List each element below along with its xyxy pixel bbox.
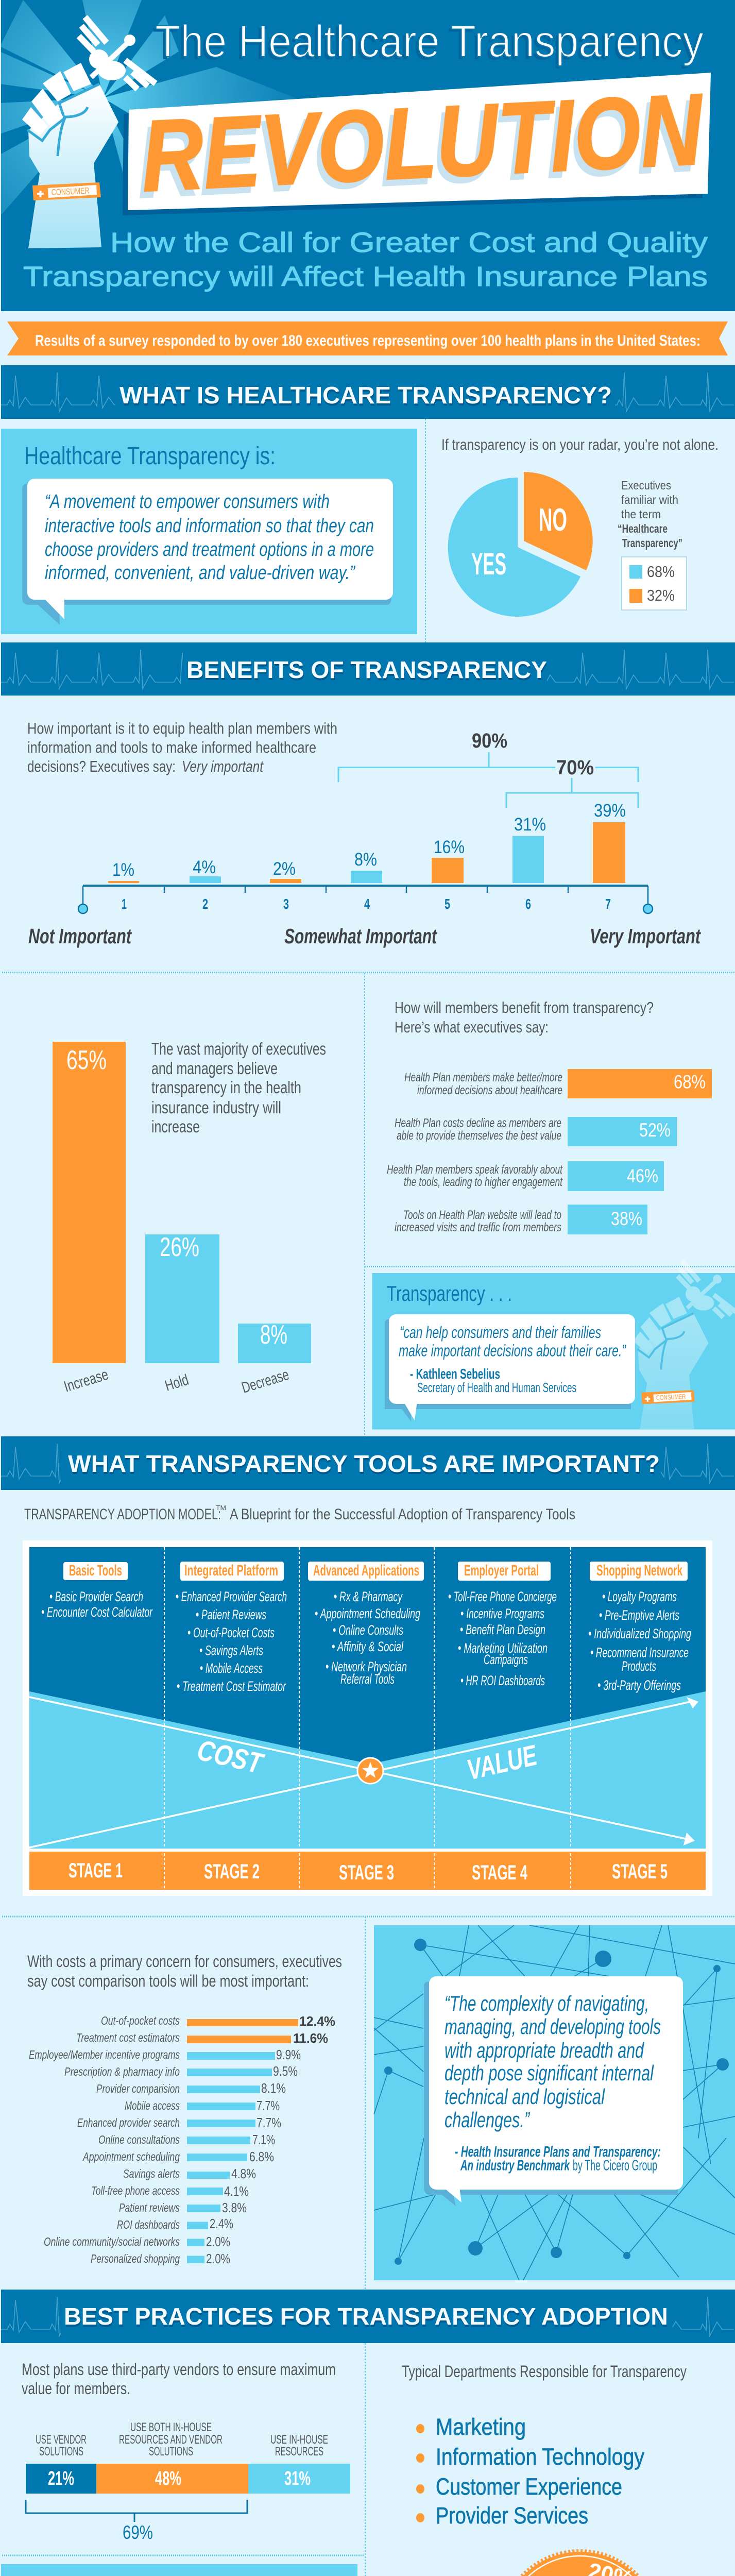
speech bubble bbox=[424, 1976, 683, 2206]
stacked bar: vendors: RESOURCES AND VENDOR bbox=[119, 2433, 223, 2447]
bar chart: cost comparison tools: Online consultations bbox=[98, 2133, 180, 2146]
bar chart: importance scale: 16% bbox=[434, 837, 465, 857]
text: how important bbox=[27, 719, 337, 775]
department list: Marketing bbox=[436, 2414, 526, 2440]
bar chart: transparency will increase: Hold bbox=[163, 1371, 191, 1395]
network nodes bbox=[384, 1939, 729, 2265]
stage 4 tools: • HR ROI Dashboards bbox=[460, 1673, 545, 1688]
quote: make important decisions about their care.” bbox=[399, 1342, 626, 1360]
quote: challenges.” bbox=[445, 2108, 530, 2132]
axis: 6 bbox=[525, 896, 531, 912]
icon: faded fist bbox=[634, 1261, 735, 1442]
text: how will members benefit bbox=[395, 998, 654, 1036]
stage 3 tools: • Affinity & Social bbox=[332, 1639, 404, 1654]
text: costs a primary concern: With costs a primary concern for consumers, executives bbox=[27, 1952, 342, 1971]
text: vast majority: transparency in the health bbox=[151, 1078, 301, 1097]
bar chart: transparency will increase bbox=[53, 1042, 311, 1397]
bar chart: importance scale: 39% bbox=[594, 801, 626, 821]
quote bbox=[445, 1991, 661, 2174]
adoption model subheading: A Blueprint for the Successful Adoption of Transparency Tools bbox=[230, 1506, 575, 1523]
bar chart: cost comparison tools bbox=[29, 2013, 335, 2266]
department list: Information Technology bbox=[436, 2444, 644, 2470]
bar chart: cost comparison tools: Patient reviews bbox=[119, 2201, 180, 2214]
text: executives familiar: the term bbox=[621, 507, 661, 521]
stage pills bbox=[63, 1562, 688, 1581]
stage labels: STAGE 2 bbox=[204, 1860, 260, 1883]
scale labels: Very Important bbox=[590, 924, 702, 948]
text: vast majority: increase bbox=[151, 1117, 200, 1136]
stage 3 tools: • Online Consults bbox=[333, 1622, 403, 1638]
speech bubble bbox=[22, 479, 393, 625]
stage labels bbox=[69, 1859, 668, 1884]
stacked bar: vendors: USE IN-HOUSE bbox=[270, 2433, 328, 2447]
text: how important: decisions? Executives say: bbox=[27, 757, 176, 775]
bar chart: cost comparison tools: Toll-free phone access bbox=[91, 2184, 180, 2197]
bar chart: member benefits: Health Plan members speak favorably about bbox=[387, 1163, 563, 1177]
axis: 5 bbox=[445, 896, 450, 912]
text: third-party vendors: value for members. bbox=[22, 2379, 130, 2398]
bar chart: cost comparison tools: Prescription & pharmacy info bbox=[64, 2065, 180, 2078]
panel: definition bbox=[0, 429, 417, 634]
bar chart: cost comparison tools: 7.7% bbox=[257, 2098, 280, 2113]
header panel bbox=[0, 0, 735, 311]
section heading: benefits: BENEFITS OF TRANSPARENCY bbox=[186, 656, 547, 683]
stage 2 tools: • Out-of-Pocket Costs bbox=[187, 1625, 275, 1640]
bar chart: member benefits: Tools on Health Plan website will lead to bbox=[403, 1208, 561, 1222]
panel heading: Transparency . . . bbox=[387, 1281, 512, 1306]
department list bbox=[416, 2414, 644, 2529]
icon: raised fist holding hands icon bbox=[22, 17, 156, 248]
bar chart: cost comparison tools: Out-of-pocket costs bbox=[101, 2014, 180, 2027]
stage 3 tools: Referral Tools bbox=[340, 1671, 395, 1687]
stage 5 tools: • 3rd-Party Offerings bbox=[597, 1677, 681, 1693]
stage 2 tools: • Savings Alerts bbox=[199, 1642, 263, 1658]
bar chart: importance scale: 31% bbox=[514, 815, 546, 835]
quote: “A movement to empower consumers with bbox=[45, 491, 330, 513]
axis: 4 bbox=[364, 896, 370, 912]
text: vast majority: and managers believe bbox=[151, 1059, 278, 1078]
stacked bar: vendors: SOLUTIONS bbox=[39, 2445, 83, 2459]
bar chart: importance scale: 4% bbox=[193, 857, 216, 877]
title line: The Healthcare Transparency bbox=[152, 19, 701, 69]
bar chart: member benefits bbox=[387, 1069, 712, 1234]
stage 2 tools: • Patient Reviews bbox=[196, 1607, 266, 1622]
bar chart: member benefits: 46% bbox=[627, 1165, 658, 1187]
quote: “can help consumers and their families bbox=[400, 1323, 601, 1342]
stage 3 tools: • Rx & Pharmacy bbox=[334, 1589, 403, 1604]
scale labels: Not Important bbox=[28, 924, 132, 948]
quote: depth pose significant internal bbox=[445, 2061, 654, 2085]
stacked bar: vendors: RESOURCES bbox=[275, 2445, 323, 2459]
bar chart: cost comparison tools: Savings alerts bbox=[123, 2167, 180, 2180]
title line: The Healthcare Transparency bbox=[155, 16, 704, 66]
stage 1 tools: • Encounter Cost Calculator bbox=[41, 1604, 153, 1620]
section heading: best practices bbox=[0, 2290, 735, 2343]
stacked bar: vendors: 31% bbox=[284, 2468, 311, 2489]
stage pills: Advanced Applications bbox=[313, 1562, 419, 1579]
bar chart: cost comparison tools: Provider comparision bbox=[96, 2082, 180, 2095]
stage labels: STAGE 4 bbox=[472, 1861, 527, 1884]
bar chart: cost comparison tools: Employee/Member incentive programs bbox=[29, 2048, 180, 2061]
quote: with appropriate breadth and bbox=[445, 2038, 644, 2062]
scale labels: Somewhat Important bbox=[284, 924, 438, 948]
bar chart: cost comparison tools: Treatment cost estimators bbox=[76, 2031, 180, 2044]
stage 2 tools: • Enhanced Provider Search bbox=[176, 1589, 287, 1604]
stage 4 tools: • Incentive Programs bbox=[460, 1606, 544, 1621]
pie legend: 68% bbox=[647, 563, 675, 581]
bar chart: cost comparison tools: 7.7% bbox=[257, 2115, 281, 2130]
bar chart: cost comparison tools: 9.5% bbox=[273, 2063, 298, 2079]
bar chart: importance scale: 8% bbox=[354, 850, 377, 870]
stage 4 tools: • Marketing Utilization bbox=[458, 1640, 548, 1656]
subtitle bbox=[23, 227, 708, 292]
bar chart: cost comparison tools: 2.0% bbox=[206, 2234, 230, 2249]
quote: choose providers and treatment options in a more bbox=[45, 539, 374, 561]
stage 3 tools bbox=[315, 1589, 420, 1687]
quote: informed, convenient, and value-driven way.” bbox=[45, 562, 356, 584]
axis: 2 bbox=[202, 896, 208, 912]
scale labels bbox=[28, 924, 702, 948]
panel: transparency quote bbox=[372, 1261, 735, 1442]
text: how important: Very important bbox=[182, 757, 264, 775]
text: executives familiar: Executives bbox=[621, 479, 671, 492]
heading: Healthcare Transparency is: bbox=[24, 443, 276, 470]
bar chart: member benefits: informed decisions about healthcare bbox=[417, 1083, 562, 1097]
pie legend: 32% bbox=[647, 586, 675, 604]
stage 4 tools: • Benefit Plan Design bbox=[460, 1622, 545, 1637]
adoption model subheading bbox=[24, 1504, 575, 1523]
stacked bar: vendors: 48% bbox=[155, 2468, 181, 2489]
section heading: tools: WHAT TRANSPARENCY TOOLS ARE IMPORTANT? bbox=[68, 1450, 660, 1477]
text: costs a primary concern bbox=[27, 1952, 342, 1990]
panel: complexity quote bbox=[374, 1925, 735, 2280]
panel: adoption model bbox=[23, 1540, 712, 1896]
bar chart: cost comparison tools: 3.8% bbox=[222, 2200, 247, 2215]
panel: consumers quote bbox=[0, 2564, 357, 2576]
badge: 20 percent bbox=[500, 2545, 663, 2576]
bar chart: transparency will increase: 65% bbox=[66, 1045, 107, 1075]
text: vast majority bbox=[151, 1039, 326, 1136]
stage 2 tools: • Treatment Cost Estimator bbox=[177, 1679, 286, 1694]
text: vast majority: The vast majority of executives bbox=[151, 1039, 326, 1058]
quote: technical and logistical bbox=[445, 2084, 605, 2109]
70 percent bracket bbox=[506, 756, 638, 808]
69 percent bracket bbox=[26, 2500, 247, 2543]
70 percent bracket: 70% bbox=[556, 756, 594, 779]
bar chart: importance scale: 2% bbox=[273, 859, 296, 879]
bar chart: cost comparison tools: Enhanced provider search bbox=[77, 2116, 180, 2129]
stacked bar: vendors: SOLUTIONS bbox=[149, 2445, 193, 2459]
bar chart: cost comparison tools: 2.4% bbox=[210, 2216, 233, 2231]
quote bbox=[45, 491, 374, 584]
stage 5 tools: • Pre-Emptive Alerts bbox=[599, 1607, 679, 1623]
stacked bar: vendors bbox=[26, 2420, 350, 2543]
text: how important: information and tools to make informed healthcare bbox=[27, 738, 316, 756]
section heading: tools bbox=[0, 1436, 735, 1490]
quote bbox=[399, 1323, 626, 1395]
axis: 3 bbox=[283, 896, 289, 912]
bar chart: cost comparison tools: 4.1% bbox=[224, 2183, 249, 2199]
cost line bbox=[29, 1697, 695, 1845]
quote: - Kathleen Sebelius bbox=[410, 1366, 500, 1382]
text: how will members benefit: Here’s what executives say: bbox=[395, 1018, 549, 1036]
stacked bar: vendors: USE VENDOR bbox=[36, 2433, 87, 2447]
stage pills: Basic Tools bbox=[69, 1562, 122, 1579]
stage 4 tools: • Toll-Free Phone Concierge bbox=[448, 1589, 557, 1604]
section heading: what is healthcare transparency bbox=[0, 365, 735, 419]
bar chart: member benefits: 52% bbox=[639, 1120, 671, 1141]
bar chart: member benefits: 68% bbox=[674, 1072, 706, 1092]
pie chart bbox=[448, 472, 593, 617]
bar chart: member benefits: increased visits and traffic from members bbox=[395, 1221, 561, 1234]
stage labels: STAGE 3 bbox=[339, 1861, 394, 1884]
stage labels: STAGE 5 bbox=[612, 1860, 668, 1883]
bar chart: transparency will increase: 26% bbox=[160, 1232, 199, 1262]
stage 1 tools: • Basic Provider Search bbox=[49, 1589, 143, 1604]
section heading: best practices: BEST PRACTICES FOR TRANSPARENCY ADOPTION bbox=[64, 2303, 668, 2330]
bar chart: cost comparison tools: 2.0% bbox=[206, 2251, 230, 2266]
bar chart: member benefits: 38% bbox=[611, 1208, 642, 1229]
stage pills: Employer Portal bbox=[464, 1562, 539, 1579]
stage 5 tools: Products bbox=[622, 1658, 656, 1674]
axis: 7 bbox=[605, 896, 611, 912]
bar chart: cost comparison tools: 8.1% bbox=[261, 2080, 286, 2096]
text: executives familiar: Transparency” bbox=[622, 536, 682, 550]
bar chart: cost comparison tools: ROI dashboards bbox=[117, 2218, 180, 2231]
stacked bar: vendors: 21% bbox=[48, 2468, 74, 2489]
text: how will members benefit: How will members benefit from transparency? bbox=[395, 998, 654, 1016]
stage pills: Integrated Platform bbox=[184, 1562, 278, 1579]
text: executives familiar bbox=[618, 479, 682, 550]
section heading: what is healthcare transparency: WHAT IS HEALTHCARE TRANSPARENCY? bbox=[119, 382, 612, 409]
stage 2 tools: • Mobile Access bbox=[200, 1660, 263, 1676]
stage 3 tools: • Network Physician bbox=[326, 1659, 407, 1674]
value label: VALUE bbox=[464, 1738, 540, 1786]
bar chart: cost comparison tools: 6.8% bbox=[249, 2149, 274, 2164]
department list: Customer Experience bbox=[436, 2473, 622, 2500]
network lines bbox=[374, 1925, 735, 2280]
stage 4 tools bbox=[448, 1589, 557, 1688]
adoption model subheading: TM bbox=[216, 1504, 226, 1512]
quote: interactive tools and information so that they can bbox=[45, 515, 374, 537]
text: costs a primary concern: say cost comparison tools will be most important: bbox=[27, 1972, 309, 1990]
pie chart: NO bbox=[539, 502, 567, 538]
subtitle: Transparency will Affect Health Insurance Plans bbox=[23, 261, 708, 292]
bar chart: member benefits: the tools, leading to higher engagement bbox=[404, 1175, 563, 1189]
bar chart: transparency will increase: Increase bbox=[62, 1366, 110, 1396]
bar chart: member benefits: Health Plan members make better/more bbox=[404, 1071, 562, 1084]
bar chart: cost comparison tools: 11.6% bbox=[293, 2030, 328, 2046]
bar chart: cost comparison tools: Online community/social networks bbox=[44, 2235, 180, 2248]
69 percent bracket: 69% bbox=[123, 2522, 153, 2543]
bar chart: importance scale bbox=[28, 801, 702, 948]
stacked bar: vendors: USE BOTH IN-HOUSE bbox=[130, 2420, 212, 2434]
bar chart: cost comparison tools: 7.1% bbox=[252, 2132, 275, 2147]
axis bbox=[78, 886, 653, 913]
department list: Provider Services bbox=[436, 2502, 588, 2529]
pie chart: YES bbox=[471, 547, 506, 581]
stage 1 tools bbox=[41, 1589, 153, 1620]
section heading: benefits bbox=[0, 642, 735, 696]
quote: An industry Benchmark bbox=[460, 2158, 570, 2174]
text: executives familiar: “Healthcare bbox=[618, 522, 668, 535]
bar chart: cost comparison tools: Appointment scheduling bbox=[82, 2150, 180, 2163]
quote: Secretary of Health and Human Services bbox=[417, 1380, 576, 1395]
stage labels: STAGE 1 bbox=[69, 1859, 123, 1882]
bar chart: importance scale: 1% bbox=[112, 860, 134, 880]
quote: by The Cicero Group bbox=[573, 2158, 657, 2174]
bar chart: transparency will increase: 8% bbox=[260, 1320, 287, 1350]
survey ribbon bbox=[7, 321, 728, 355]
adoption model subheading: TRANSPARENCY ADOPTION MODEL: bbox=[24, 1506, 221, 1523]
stage 3 tools: • Appointment Scheduling bbox=[315, 1606, 420, 1621]
axis: 1 bbox=[122, 896, 127, 912]
bar chart: cost comparison tools: Personalized shopping bbox=[91, 2252, 180, 2265]
stage 5 tools: • Loyalty Programs bbox=[602, 1589, 677, 1604]
bar chart: cost comparison tools: Mobile access bbox=[125, 2099, 180, 2112]
value line bbox=[29, 1697, 698, 1848]
text: how important: How important is it to equip health plan members with bbox=[27, 719, 337, 737]
text: vast majority: insurance industry will bbox=[151, 1098, 281, 1117]
bar chart: member benefits: able to provide themselves the best value bbox=[397, 1129, 561, 1143]
90 percent bracket: 90% bbox=[472, 730, 507, 752]
cost label: COST bbox=[194, 1733, 267, 1780]
icon: star bbox=[357, 1758, 383, 1784]
text: third-party vendors: Most plans use third-party vendors to ensure maximum bbox=[22, 2360, 336, 2379]
90 percent bracket bbox=[338, 730, 638, 782]
quote: “The complexity of navigating, bbox=[445, 1991, 649, 2015]
stage 5 tools bbox=[588, 1589, 691, 1693]
stage pills: Shopping Network bbox=[596, 1562, 682, 1579]
bar chart: member benefits: Health Plan costs decline as members are bbox=[395, 1116, 561, 1130]
bar chart: cost comparison tools: 12.4% bbox=[299, 2013, 335, 2029]
text: executives familiar: familiar with bbox=[621, 493, 678, 506]
bar chart: cost comparison tools: 9.9% bbox=[276, 2047, 301, 2062]
sunburst rays bbox=[0, 0, 309, 216]
speech bubble bbox=[385, 1314, 635, 1421]
subtitle: How the Call for Greater Cost and Quality bbox=[110, 227, 708, 258]
stage 4 tools: Campaigns bbox=[484, 1652, 528, 1667]
bar chart: transparency will increase: Decrease bbox=[240, 1366, 291, 1397]
text: third-party vendors bbox=[22, 2360, 336, 2398]
pie legend bbox=[622, 557, 687, 610]
stage 2 tools bbox=[176, 1589, 287, 1694]
bar chart: cost comparison tools: 4.8% bbox=[231, 2166, 256, 2181]
